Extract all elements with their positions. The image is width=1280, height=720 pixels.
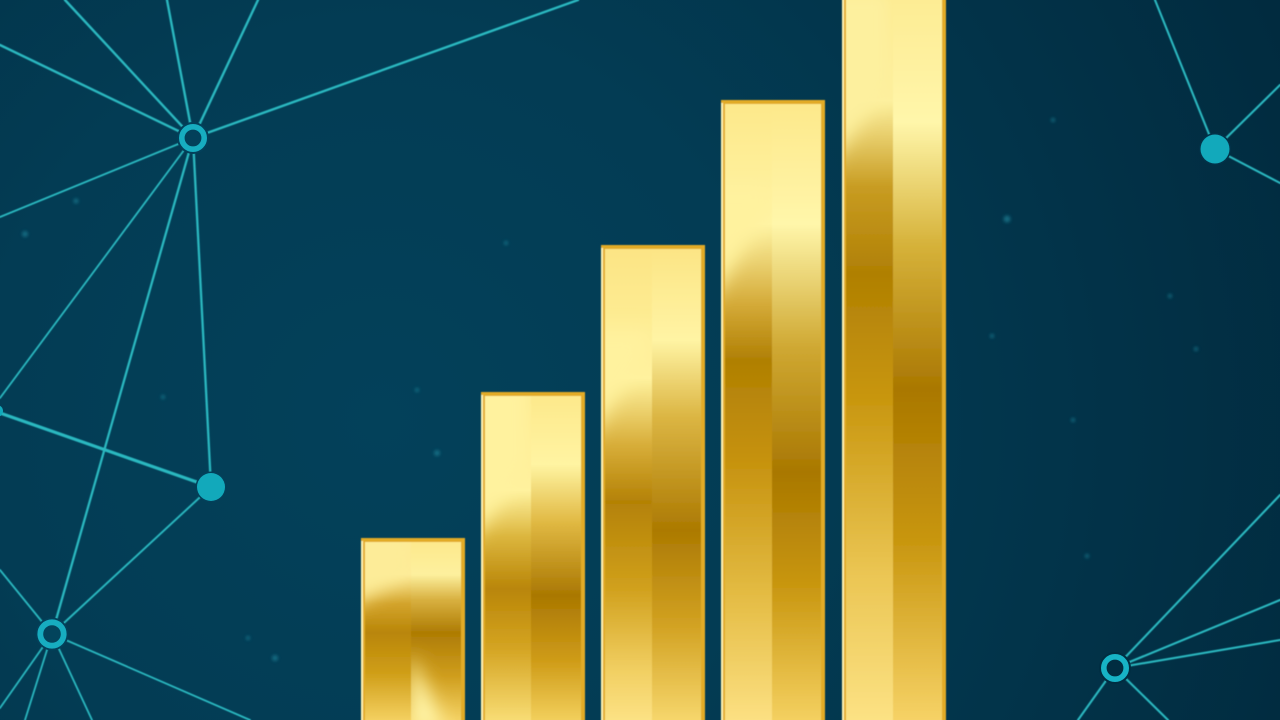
network: left cluster — [0, 0, 578, 720]
node: left edge — [0, 405, 3, 417]
network lines: left cluster — [0, 0, 578, 720]
bar 2 — [480, 391, 586, 720]
node: top-left ring — [177, 122, 209, 154]
network lines: right cluster — [1078, 0, 1280, 720]
bar 4 — [720, 99, 826, 720]
node: left filled — [196, 472, 226, 502]
bar 5 — [841, 0, 947, 720]
gold bar chart — [345, 0, 946, 720]
bar 1 — [360, 537, 466, 720]
network: right cluster — [1078, 0, 1280, 720]
bar 3 — [600, 244, 706, 720]
background sparkle dots — [22, 118, 1198, 661]
node: bottom-right ring — [1099, 652, 1131, 684]
node: bottom-left ring — [36, 618, 68, 650]
node: top-right filled — [1199, 133, 1231, 165]
